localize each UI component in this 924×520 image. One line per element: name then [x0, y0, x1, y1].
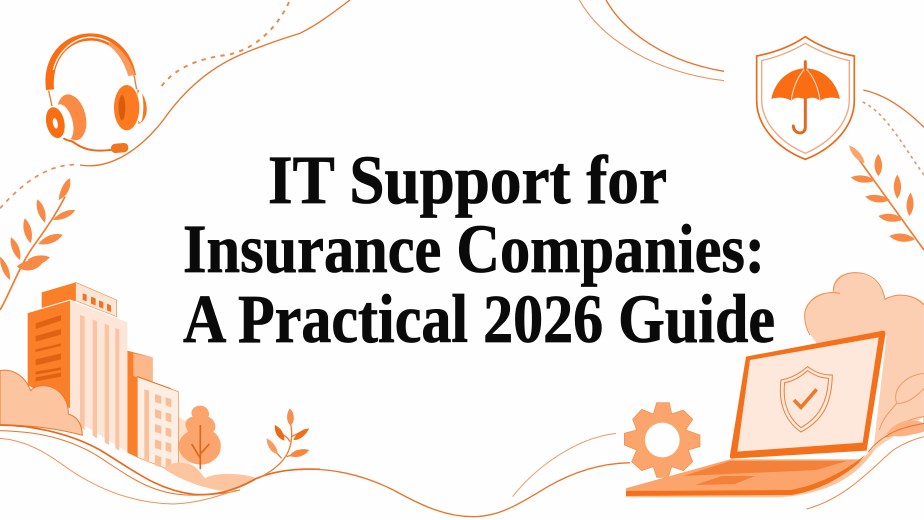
icon: shield with umbrella: [757, 37, 854, 159]
top left flowing lines: [0, 0, 350, 208]
title: A Practical 2026 Guide: [183, 281, 775, 357]
title: Insurance Companies:: [183, 211, 765, 287]
title: IT Support for: [268, 142, 667, 218]
icon: small sprig: [258, 408, 309, 478]
curves: [868, 423, 924, 452]
title: [183, 142, 775, 357]
back building: [127, 351, 190, 473]
background leaf: [879, 373, 924, 437]
ground curves: [0, 425, 320, 504]
tree: [179, 406, 221, 469]
main tower: [28, 282, 127, 452]
icon: right leaf branch: [849, 145, 924, 250]
laptop: [626, 331, 885, 497]
icon: headset: [43, 33, 147, 153]
bottom middle flowing lines: [300, 433, 630, 517]
icon: left leaf branch: [0, 178, 75, 310]
icon: check shield: [780, 367, 832, 432]
icon: gear: [624, 403, 700, 477]
illustration: city buildings, bushes and tree: [0, 282, 320, 504]
bushes: [0, 370, 82, 435]
cloud: [805, 273, 924, 450]
top right flowing lines: [579, 0, 924, 175]
illustration: laptop, cloud and gear: [624, 273, 924, 509]
